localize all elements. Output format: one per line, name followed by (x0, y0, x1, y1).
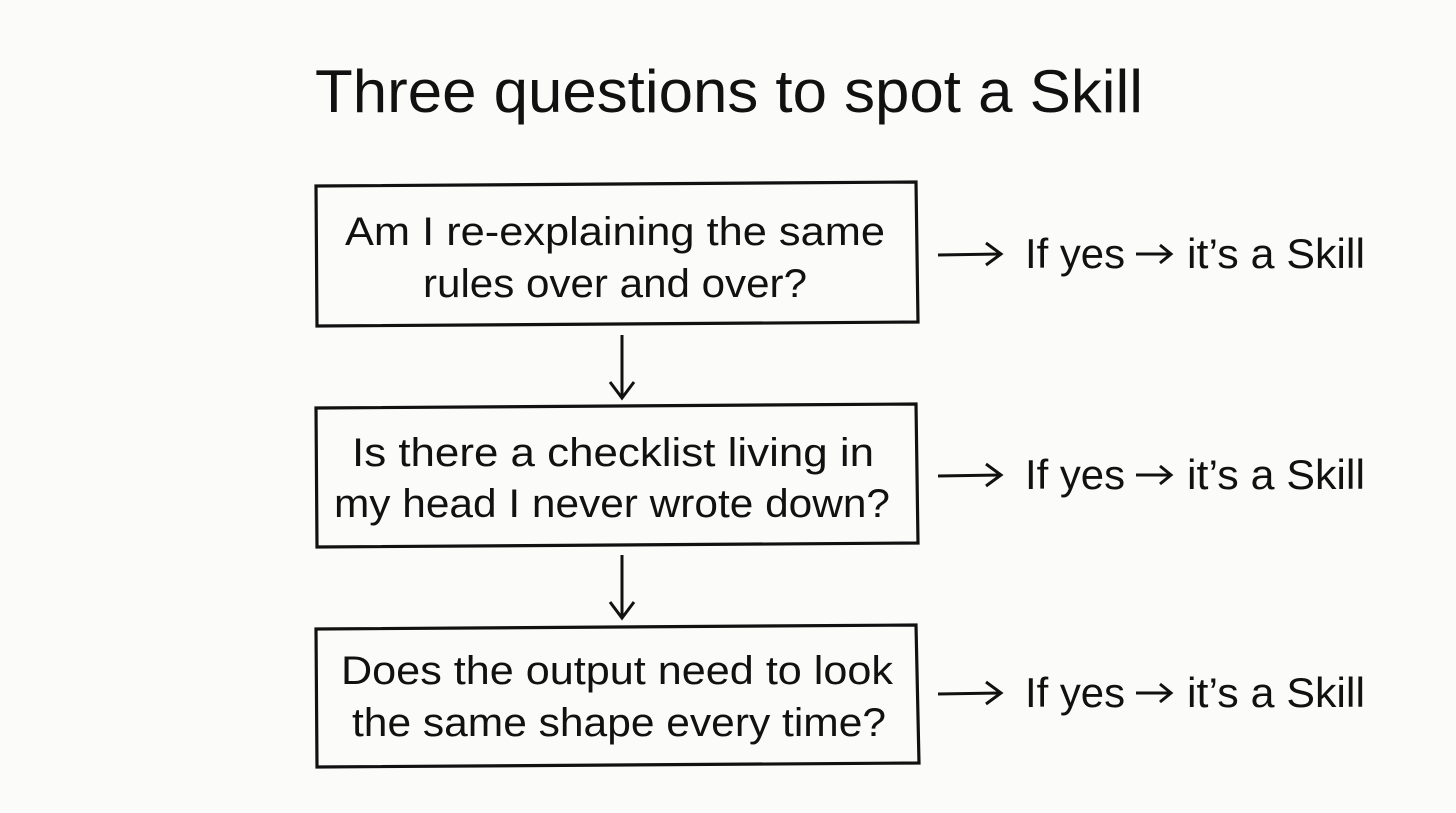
box 2: checklist in head (316, 404, 918, 547)
outcome 1: If yes (1025, 230, 1125, 277)
outcome 3: it’s a Skill (1187, 669, 1365, 716)
outcome 3 (938, 669, 1365, 716)
arrow: box 1 to box 2 (610, 335, 634, 398)
box 1: re-explaining rules (316, 182, 918, 326)
outcome 2: If yes (1025, 451, 1125, 498)
box 1: re-explaining rules: Am I re-explaining the same (345, 210, 885, 254)
box 2: checklist in head: my head I never wrote down? (334, 482, 890, 526)
box 3: output same shape (316, 625, 919, 767)
outcome 3: If yes (1025, 669, 1125, 716)
outcome 2 (938, 451, 1365, 498)
box 3: output same shape: the same shape every time? (352, 701, 886, 745)
box 1: re-explaining rules: rules over and over? (423, 262, 807, 306)
outcome 1 (938, 230, 1365, 277)
arrow: box 2 to box 3 (610, 555, 634, 618)
box 3: output same shape: Does the output need to look (341, 649, 894, 693)
outcome 2: it’s a Skill (1187, 451, 1365, 498)
box 2: checklist in head: Is there a checklist living in (352, 431, 874, 475)
outcome 1: it’s a Skill (1187, 230, 1365, 277)
title: Three questions to spot a Skill (315, 58, 1143, 125)
